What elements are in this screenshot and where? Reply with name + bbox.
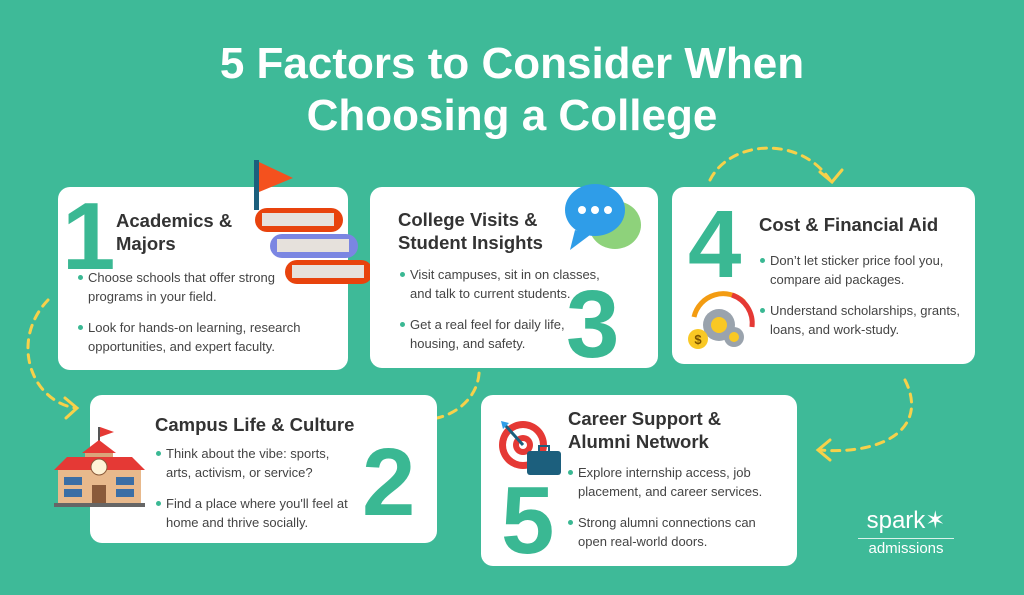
number 4: 4	[688, 191, 741, 298]
panel: 4 cost	[672, 187, 975, 364]
heading: Academics &	[116, 210, 232, 231]
icon: target and briefcase	[499, 421, 561, 475]
icon: school building	[54, 427, 145, 507]
bullets: Don’t let sticker price fool you, compare aid packages.	[770, 253, 943, 287]
heading	[568, 408, 721, 452]
heading: Majors	[116, 233, 176, 254]
bullets: Choose schools that offer strong programs in your field.	[88, 270, 275, 304]
bullets: Strong alumni connections can open real-world doors.	[578, 515, 756, 549]
panel: 3 college visits	[370, 187, 658, 368]
title: 5 Factors to Consider When	[220, 39, 804, 88]
icon: books with flag	[254, 160, 370, 284]
title: Choosing a College	[307, 91, 717, 140]
number 3: 3	[566, 271, 619, 378]
bullets: Get a real feel for daily life, housing, and safety.	[410, 317, 565, 351]
bullets	[568, 465, 762, 549]
panel: 2 campus life	[90, 395, 437, 543]
bullets: Find a place where you'll feel at home and thrive socially.	[166, 496, 348, 530]
bullets: Visit campuses, sit in on classes, and talk to current students.	[410, 267, 600, 301]
bullets: Think about the vibe: sports, arts, activism, or service?	[166, 446, 329, 480]
number 5: 5	[501, 467, 554, 574]
bullets: Understand scholarships, grants, loans, and work-study.	[770, 303, 960, 337]
logo: spark admissions: admissions	[868, 540, 944, 557]
heading: Alumni Network	[568, 431, 709, 452]
icon: gears and coin	[688, 291, 755, 349]
heading: Campus Life & Culture	[155, 414, 354, 435]
logo: spark admissions: spark✶	[867, 507, 945, 534]
panel: 5 career	[481, 395, 797, 566]
number 1: 1	[62, 183, 115, 290]
bullets	[400, 267, 600, 351]
bullets: Look for hands-on learning, research opportunities, and expert faculty.	[88, 320, 300, 354]
icon: gears and coin: $	[694, 332, 702, 347]
bullets	[156, 446, 348, 530]
heading: Student Insights	[398, 232, 543, 253]
title	[220, 39, 804, 140]
bullets	[78, 270, 300, 354]
number 2: 2	[362, 429, 415, 536]
logo: spark admissions	[858, 507, 954, 557]
icon: chat bubbles	[565, 184, 641, 250]
heading: Career Support &	[568, 408, 721, 429]
heading: College Visits &	[398, 209, 537, 230]
bullets	[760, 253, 960, 337]
heading	[116, 210, 232, 254]
heading: Cost & Financial Aid	[759, 214, 938, 235]
panel: 1 academics	[58, 187, 348, 370]
bullets: Explore internship access, job placement, and career services.	[578, 465, 762, 499]
heading	[398, 209, 543, 253]
